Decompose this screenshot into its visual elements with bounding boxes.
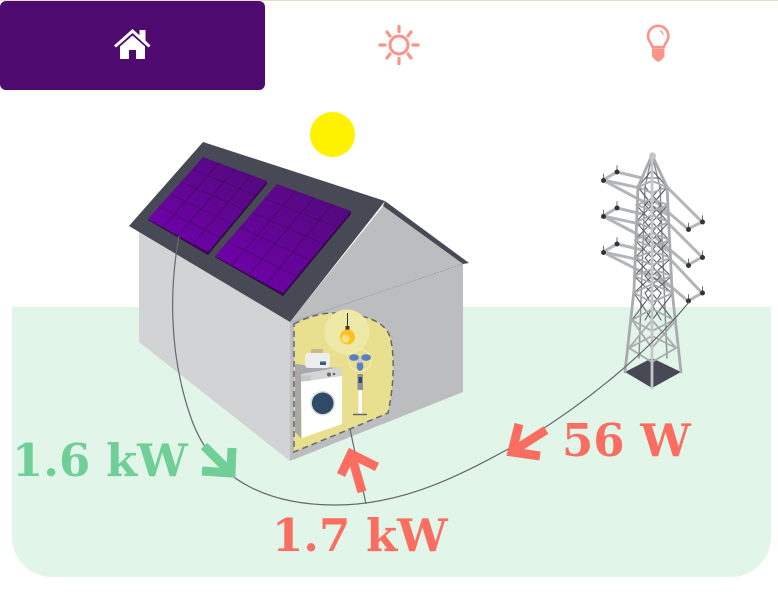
tower base [625, 358, 681, 388]
wiring [173, 236, 689, 505]
icon: home [114, 29, 150, 59]
toaster [305, 349, 330, 368]
lattice [629, 170, 676, 348]
gable wall [290, 206, 463, 461]
sun [310, 112, 355, 157]
tab: sun icon [380, 26, 418, 64]
washing machine [295, 364, 342, 438]
label: solar power: 1.6 kW [12, 434, 189, 487]
house [129, 142, 469, 461]
tower legs [625, 155, 681, 388]
light bulb [324, 310, 370, 354]
cross arms [603, 172, 702, 301]
interior cutaway [294, 310, 393, 452]
arrow: solar generation [202, 446, 232, 473]
solar panel left [148, 157, 267, 255]
tab: bulb icon [648, 26, 668, 62]
solar panel right [215, 184, 351, 296]
arrow: grid import [512, 424, 546, 456]
fan [349, 350, 371, 414]
label: house consumption: 1.7 kW [272, 509, 449, 562]
label: grid power: 56 W [562, 414, 692, 467]
ground panel [12, 307, 771, 577]
roof [129, 142, 385, 322]
rear legs [639, 155, 667, 358]
transmission tower [602, 152, 704, 388]
arrow: house consumption [341, 454, 377, 492]
left wall [139, 232, 290, 461]
tab: home (active) [0, 1, 265, 90]
insulators [602, 166, 704, 303]
